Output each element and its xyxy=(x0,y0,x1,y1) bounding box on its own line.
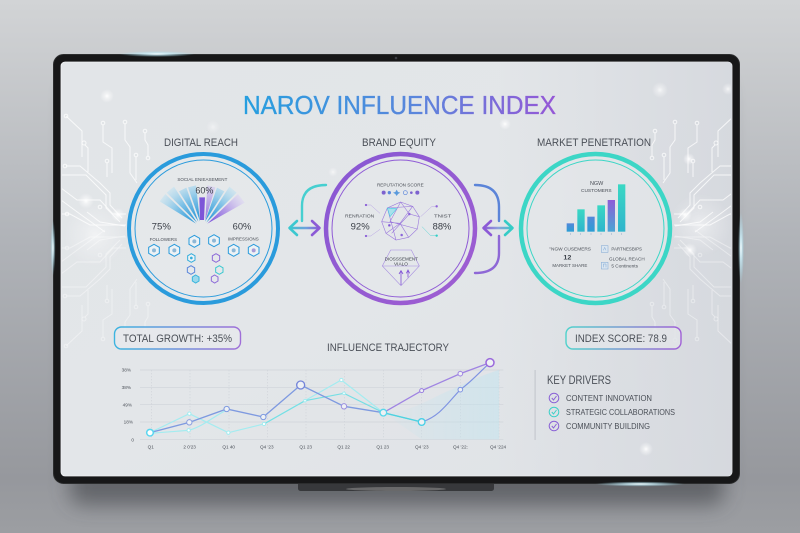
label: 5 continents: 5 Continents xyxy=(611,263,639,268)
value: 12: 12 xyxy=(563,256,572,262)
shaded area xyxy=(383,370,499,439)
chart markers xyxy=(147,359,494,436)
camera dot xyxy=(395,57,397,59)
label: followers: FOLLOWERS xyxy=(150,237,177,242)
driver: strategic collaborations: STRATEGIC COLLABORATIONS xyxy=(566,407,675,417)
line chart: influence trajectory xyxy=(122,359,507,450)
driver: community building: COMMUNITY BUILDING xyxy=(566,421,650,431)
label: trust: TNIST xyxy=(434,213,452,218)
x axis labels: Q4 '23 xyxy=(260,445,274,450)
value: 60% top: 60% xyxy=(195,185,213,195)
heading: key drivers: KEY DRIVERS xyxy=(547,373,611,387)
heading: influence trajectory: INFLUENCE TRAJECTORY xyxy=(327,342,450,354)
icon: partnerships xyxy=(601,246,608,252)
brand equity contents xyxy=(345,182,452,286)
y axis labels: 0 xyxy=(131,437,134,442)
y axis labels xyxy=(122,367,134,442)
small glow markers xyxy=(187,378,345,434)
gem network diagram xyxy=(382,202,419,240)
panel: digital reach xyxy=(129,154,278,303)
driver: content innovation: CONTENT INNOVATION xyxy=(566,393,652,403)
label: customers: CUSTOMERS xyxy=(581,188,612,194)
label: social engagement: SOCIAL ENIEASEMENT xyxy=(177,177,227,182)
value: 88%: 88% xyxy=(433,222,451,232)
label: global reach: GLOBAL REACH xyxy=(609,256,645,261)
value: 60% right: 60% xyxy=(233,221,251,231)
series: teal xyxy=(264,393,422,424)
connector arcs and arrows: left xyxy=(290,185,326,235)
bezel light flares xyxy=(50,51,744,486)
monitor bezel xyxy=(54,54,740,484)
panel: market penetration xyxy=(521,154,670,303)
callout: index score: INDEX SCORE: 78.9 xyxy=(575,333,667,345)
value: 92%: 92% xyxy=(351,222,370,232)
heading: brand equity: BRAND EQUITY xyxy=(362,137,437,149)
diamond arrows xyxy=(399,270,410,285)
fan chart xyxy=(160,185,245,224)
x axis labels: Q4 '22: xyxy=(453,445,468,450)
x axis labels: Q4 '23 xyxy=(415,445,429,450)
panel: brand equity xyxy=(326,154,475,303)
connector arcs and arrows: right xyxy=(475,185,512,273)
divider xyxy=(534,370,536,440)
x axis labels: Q1 23 xyxy=(376,445,389,450)
x axis labels: Q4 '224 xyxy=(490,445,507,450)
x axis labels: Q1 23 xyxy=(299,445,312,450)
panel: key drivers xyxy=(547,373,675,431)
label: partnerships: PARTNESBIPS xyxy=(611,247,642,252)
callout: total growth xyxy=(114,327,240,349)
x axis labels: Q1 xyxy=(148,445,154,450)
y axis labels: 38% xyxy=(122,367,131,372)
market penetration contents xyxy=(549,181,645,269)
bar chart xyxy=(567,184,625,235)
series: purple rising xyxy=(383,363,490,413)
x axis labels: 2 0'23 xyxy=(183,445,196,450)
series: light cyan xyxy=(150,380,383,433)
callout: index score xyxy=(566,327,681,349)
digital reach contents xyxy=(149,177,259,283)
label: value: VIALO xyxy=(394,262,409,267)
label: new customers: NGW xyxy=(590,181,604,187)
label: diamond value: DIOSSSEMENT xyxy=(385,256,418,261)
circuit decoration xyxy=(61,82,739,456)
screen xyxy=(61,62,732,476)
y axis labels: 18% xyxy=(124,420,133,425)
y axis labels: 38% xyxy=(122,385,131,390)
reputation icons row xyxy=(382,190,419,196)
diamond shape xyxy=(382,250,419,286)
gem callout lines xyxy=(365,204,438,237)
monitor shadow xyxy=(70,80,724,505)
title: NAROV INFLUENCE INDEX xyxy=(243,90,556,120)
label: renration: RENRATION xyxy=(345,213,374,218)
hexagon icons xyxy=(149,235,259,283)
x axis labels xyxy=(148,445,507,450)
x axis labels: Q1 22 xyxy=(337,445,350,450)
label: reputation score: REPUTATION SCORE xyxy=(377,182,424,188)
series: blue rising xyxy=(422,363,490,422)
callout: total growth: TOTAL GROWTH: +35% xyxy=(123,333,232,345)
label: impressions: IMPRESSIONS xyxy=(228,237,259,242)
icon: global reach xyxy=(601,262,608,269)
monitor stand xyxy=(298,482,494,491)
heading: market penetration: MARKET PENETRATION xyxy=(537,137,651,149)
chart grid xyxy=(140,370,503,439)
label: market share: MARKET SHARE xyxy=(552,263,587,268)
x axis labels: Q1 40 xyxy=(222,445,235,450)
heading: digital reach: DIGITAL REACH xyxy=(164,137,238,149)
y axis labels: 49% xyxy=(123,402,132,407)
series: blue purple xyxy=(150,385,383,433)
label: new customers stat: "NGW CUSEMERS xyxy=(549,246,591,251)
series: teal segment xyxy=(383,413,422,422)
value: 75%: 75% xyxy=(152,221,171,231)
